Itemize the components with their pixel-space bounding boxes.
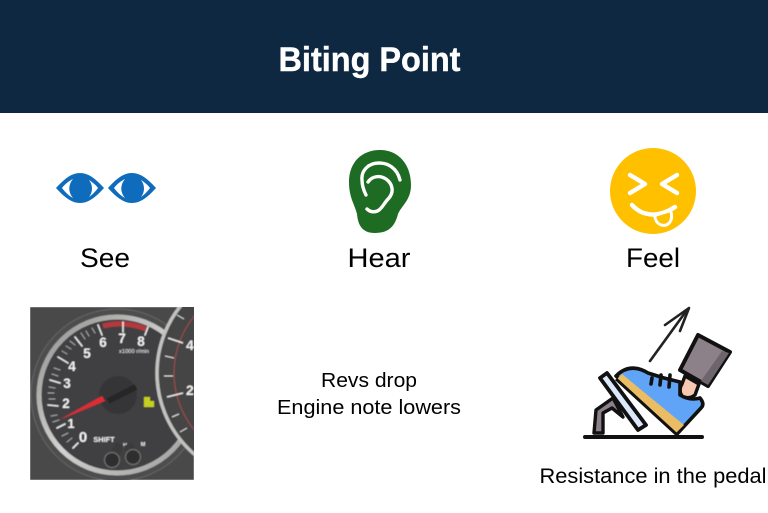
tachometer numerals: 7 xyxy=(118,331,126,346)
tachometer numerals: x1000 r/min xyxy=(119,349,149,355)
pedal arm xyxy=(594,398,623,433)
tachometer numerals: 1 xyxy=(67,416,75,431)
tachometer numerals: 0 xyxy=(79,429,87,446)
icon: ear xyxy=(349,150,411,233)
tachometer redline xyxy=(103,324,146,329)
shoe xyxy=(616,368,703,434)
image: rev counter gauge: 2 xyxy=(186,382,194,398)
label: Feel: Feel xyxy=(626,243,680,273)
icon: foot lifting off clutch pedal xyxy=(585,308,730,437)
caption: resistance in the pedal: Resistance in the pedal xyxy=(540,465,766,488)
trouser leg xyxy=(680,335,730,386)
sole outline xyxy=(616,379,676,434)
tachometer numerals: 6 xyxy=(99,335,107,350)
speedometer bezel xyxy=(154,307,194,456)
tachometer numerals: 2 xyxy=(62,396,70,411)
tachometer numerals: 8 xyxy=(137,334,145,349)
warning light xyxy=(144,397,154,407)
tachometer numerals: M xyxy=(141,442,146,448)
laces xyxy=(651,375,670,387)
icon: tongue-out face xyxy=(610,148,696,234)
image: rev counter gauge xyxy=(30,307,194,480)
label: Hear: Hear xyxy=(348,243,410,273)
title: Biting Point xyxy=(278,41,460,79)
image: rev counter gauge: 4 xyxy=(186,337,194,353)
ground line xyxy=(585,435,702,439)
ankle xyxy=(680,376,699,398)
middle text: what you hear: Revs drop xyxy=(321,369,417,392)
tachometer ticks xyxy=(48,322,148,448)
icon: eyes xyxy=(56,173,156,203)
tachometer numerals: 5 xyxy=(83,346,91,361)
gauge needle xyxy=(59,396,105,420)
tachometer numerals: SHIFT xyxy=(93,435,115,444)
pedal plate xyxy=(600,373,646,430)
upward arrow xyxy=(650,308,689,361)
middle text: what you hear xyxy=(277,369,461,419)
gauge hub xyxy=(99,376,137,414)
tachometer numerals: 3 xyxy=(63,376,71,391)
tachometer numerals xyxy=(62,331,149,449)
shift knobs xyxy=(104,444,140,468)
shoe sole xyxy=(617,374,684,433)
tachometer numerals: H xyxy=(123,443,127,449)
header banner xyxy=(0,0,768,113)
middle text: what you hear: Engine note lowers xyxy=(277,396,461,419)
label: See: See xyxy=(80,243,130,273)
tachometer numerals: 4 xyxy=(68,359,76,374)
